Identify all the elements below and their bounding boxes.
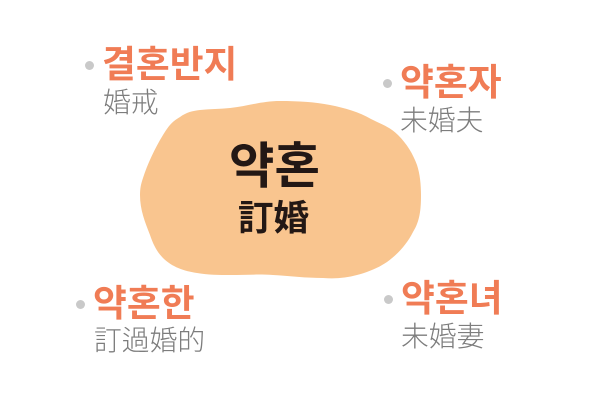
bullet: bottom right [384, 295, 393, 304]
hanja: wedding ring: 婚戒 [103, 87, 159, 118]
heading: fiance: 약혼자 [400, 62, 502, 103]
main subtitle: 訂婚 [238, 198, 309, 238]
heading: wedding ring: 결혼반지 [102, 44, 237, 85]
heading: fiancee: 약혼녀 [401, 278, 503, 319]
hanja: fiancee: 未婚妻 [401, 321, 484, 352]
bullet: top left [85, 61, 94, 70]
bullet: top right [383, 79, 392, 88]
hanja: fiance: 未婚夫 [400, 105, 483, 136]
heading: engaged person: 약혼한 [93, 283, 195, 324]
bullet: bottom left [76, 300, 85, 309]
hanja: engaged person: 訂過婚的 [94, 325, 205, 356]
main title: 약혼 [229, 139, 320, 194]
